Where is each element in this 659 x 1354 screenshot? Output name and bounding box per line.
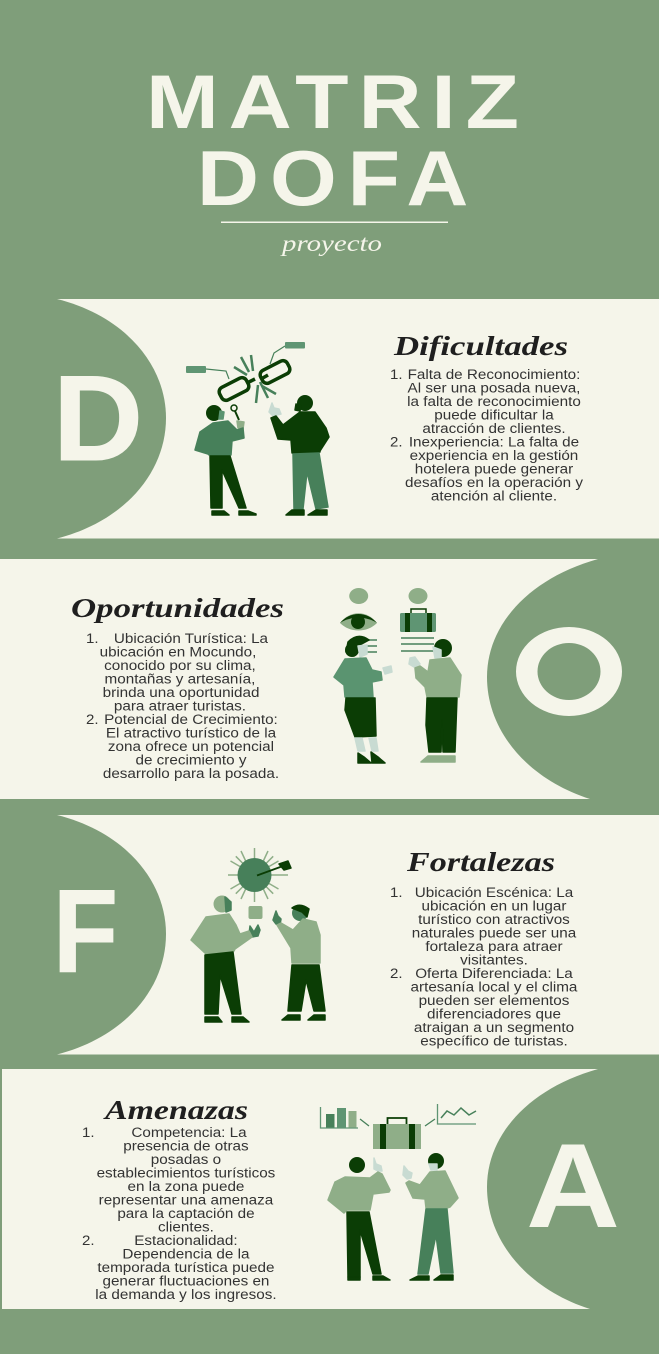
text: amenazas: presencia de otras — [123, 1139, 249, 1154]
text: amenazas: la demanda y los ingresos. — [95, 1288, 277, 1303]
panel: amenazas — [2, 1069, 659, 1309]
text: fortalezas: visitantes. — [460, 953, 528, 968]
text: fortalezas — [390, 886, 578, 1049]
text: oportunidades: para atraer turistas. — [114, 699, 246, 714]
text: amenazas: clientes. — [158, 1220, 214, 1235]
illustration: man left — [328, 1157, 390, 1280]
letter badge D — [0, 299, 166, 538]
panel: dificultades — [0, 299, 659, 538]
text: oportunidades: montañas y artesanía, — [105, 672, 255, 687]
letter badge F: F — [53, 866, 118, 998]
text: dificultades: atención al cliente. — [431, 489, 557, 504]
text: oportunidades: de crecimiento y — [135, 753, 247, 768]
text: amenazas: generar fluctuaciones en — [102, 1274, 269, 1289]
text: fortalezas: fortaleza para atraer — [425, 940, 563, 955]
illustration: person pointing — [269, 395, 329, 515]
text: fortalezas: artesanía local y el clima — [411, 980, 578, 995]
text: fortalezas: diferenciadores que — [427, 1007, 561, 1022]
text: amenazas: Estacionalidad: — [134, 1234, 238, 1249]
text: amenazas: Competencia: La — [131, 1126, 248, 1141]
text: amenazas: posadas o — [151, 1153, 221, 1168]
text: fortalezas: Oferta Diferenciada: La — [415, 967, 574, 982]
text: dificultades: Inexperiencia: La falta de — [409, 435, 579, 450]
text: dificultades: 2. — [390, 435, 403, 450]
text: dificultades: hotelera puede generar — [415, 462, 573, 477]
text: dificultades: la falta de reconocimiento — [407, 395, 581, 410]
text: dificultades: Al ser una posada nueva, — [408, 381, 580, 396]
text: fortalezas: Ubicación Escénica: La — [415, 886, 574, 901]
letter badge F — [0, 815, 166, 1054]
letter badge A — [487, 1069, 659, 1309]
text: oportunidades: Potencial de Crecimiento: — [104, 713, 278, 728]
illustration: man right — [403, 1153, 458, 1280]
text: amenazas: representar una amenaza — [99, 1193, 274, 1208]
text: fortalezas: atraigan a un segmento — [414, 1021, 574, 1036]
text: oportunidades: ubicación en Mocundo, — [100, 645, 256, 660]
letter badge A: A — [526, 1119, 620, 1253]
illustration: man — [409, 639, 461, 762]
text: oportunidades: zona ofrece un potencial — [108, 740, 274, 755]
text: fortalezas: naturales puede ser una — [412, 926, 577, 941]
illustration: target with dart — [228, 848, 291, 919]
text: amenazas: Dependencia de la — [122, 1247, 250, 1262]
text: dificultades: experiencia en la gestión — [410, 449, 578, 464]
heading: Fortalezas — [406, 847, 555, 877]
title — [146, 60, 529, 222]
heading: Amenazas — [102, 1095, 248, 1125]
text: fortalezas: ubicación en un lugar — [422, 899, 567, 914]
panel: oportunidades — [0, 559, 659, 799]
illustration: woman — [334, 636, 392, 763]
text: fortalezas: pueden ser elementos — [419, 994, 569, 1009]
heading: Oportunidades — [71, 593, 284, 623]
text: oportunidades: El atractivo turístico de la — [106, 726, 277, 741]
text: amenazas: en la zona puede — [127, 1180, 244, 1195]
text: oportunidades: Ubicación Turística: La — [114, 632, 269, 647]
illustration: person with magnifier — [195, 405, 256, 515]
letter badge D: D — [53, 350, 143, 486]
text: oportunidades: desarrollo para la posada. — [103, 767, 279, 782]
illustration: broken chain — [186, 342, 305, 403]
text: dificultades: Falta de Reconocimiento: — [408, 368, 580, 383]
panel: fortalezas — [0, 815, 659, 1054]
illustration: charts and suitcase — [320, 1104, 476, 1149]
text: amenazas: establecimientos turísticos — [97, 1166, 275, 1181]
text: fortalezas: 1. — [390, 886, 403, 901]
illustration: man right — [273, 905, 325, 1020]
title: MATRIZ — [146, 60, 529, 145]
text: amenazas: 1. — [82, 1126, 95, 1141]
text: amenazas: para la captación de — [117, 1207, 255, 1222]
text: dificultades — [390, 368, 584, 504]
text: dificultades: 1. — [390, 368, 403, 383]
heading: Dificultades — [393, 331, 568, 361]
text: amenazas — [82, 1126, 277, 1303]
text: amenazas: temporada turística puede — [97, 1261, 274, 1276]
text: oportunidades: 1. — [86, 632, 99, 647]
text: oportunidades: conocido por su clima, — [104, 659, 256, 674]
text: oportunidades: 2. — [86, 713, 99, 728]
text: fortalezas: turístico con atractivos — [418, 913, 570, 928]
title: DOFA — [197, 136, 479, 222]
text: dificultades: puede dificultar la — [434, 408, 555, 423]
subtitle: proyecto — [279, 231, 382, 256]
illustration: eye and suitcase icons — [340, 588, 436, 652]
text: oportunidades — [86, 632, 279, 782]
text: fortalezas: específico de turistas. — [420, 1034, 568, 1049]
text: fortalezas: 2. — [390, 967, 403, 982]
text: oportunidades: brinda una oportunidad — [103, 686, 259, 701]
illustration: man left — [191, 896, 260, 1022]
text: amenazas: 2. — [82, 1234, 95, 1249]
text: dificultades: desafíos en la operación y — [405, 476, 584, 491]
letter badge O — [487, 559, 659, 799]
text: dificultades: atracción de clientes. — [422, 422, 566, 437]
